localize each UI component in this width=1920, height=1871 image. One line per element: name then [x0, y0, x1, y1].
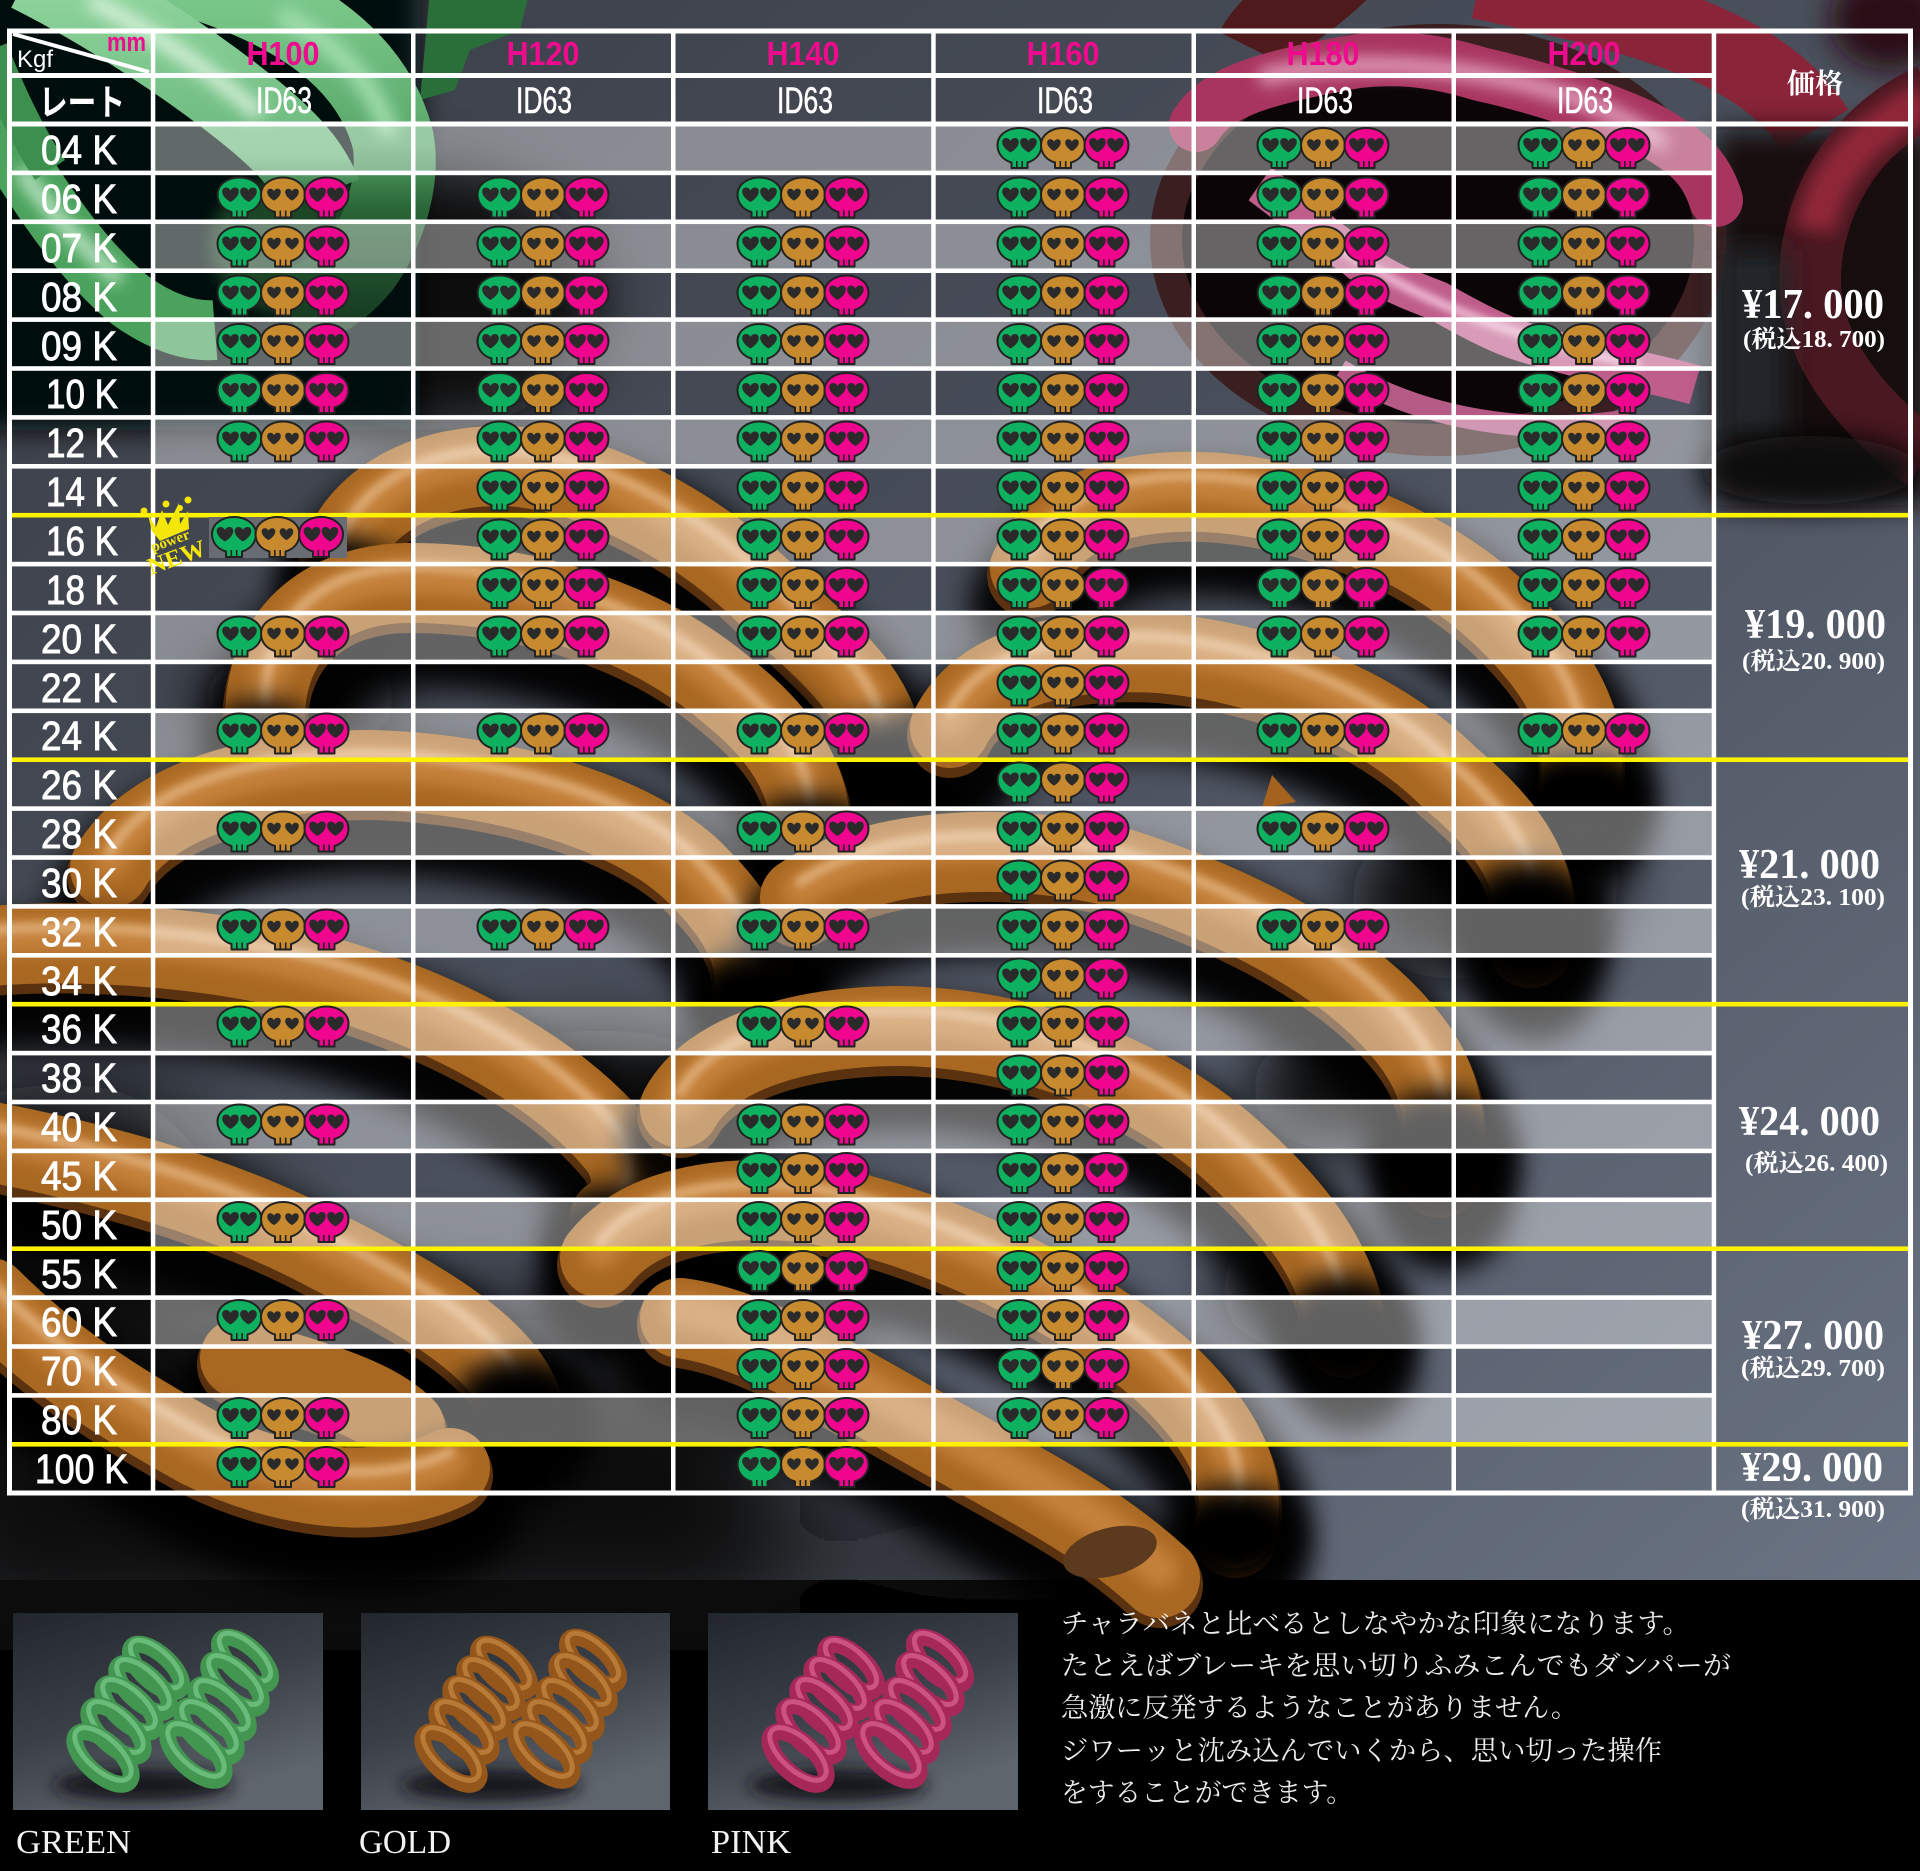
- rate column labels: 22 K: [41, 665, 117, 711]
- header: inner diameter: [256, 80, 1613, 121]
- rate column labels: 30 K: [41, 860, 117, 906]
- header: spring heights: H200: [1548, 35, 1620, 72]
- rate column labels: 18 K: [46, 567, 118, 613]
- photo: gold springs: [361, 1613, 670, 1810]
- rate column labels: 36 K: [41, 1006, 117, 1052]
- header: inner diameter: ID63: [777, 80, 833, 121]
- rate column labels: 10 K: [46, 371, 118, 417]
- availability row 22K: [998, 666, 1128, 706]
- header: inner diameter: ID63: [516, 80, 572, 121]
- rate column labels: 55 K: [41, 1251, 117, 1297]
- description text: たとえばブレーキを思い切りふみこんでもダンパーが: [1061, 1651, 1731, 1681]
- availability row 04K: [998, 128, 1650, 168]
- availability row 24K: [218, 714, 1650, 754]
- rate column labels: 12 K: [46, 420, 118, 466]
- price labels: [1739, 282, 1888, 1523]
- availability row 32K: [218, 910, 1388, 950]
- description text: [1061, 1609, 1731, 1808]
- crimson spring: [1166, 0, 1920, 505]
- price labels: (税込29. 700): [1741, 1355, 1885, 1382]
- availability row 16K: [478, 520, 1650, 560]
- rate column labels: 60 K: [41, 1299, 117, 1345]
- icon: 326 power NEW crown: [140, 496, 209, 581]
- price labels: ¥29. 000: [1741, 1445, 1883, 1491]
- availability row 20K: [218, 616, 1650, 656]
- header: spring heights: H120: [506, 35, 580, 72]
- header corner cell: Kgf / mm diagonal: mm: [107, 27, 146, 57]
- header corner cell: Kgf / mm diagonal: [13, 27, 149, 73]
- rate column labels: 07 K: [41, 225, 117, 271]
- availability row 09K: [218, 324, 1650, 364]
- availability row 36K: [218, 1006, 1128, 1046]
- header: spring heights: H180: [1286, 35, 1360, 72]
- price labels: (税込20. 900): [1742, 648, 1885, 675]
- header: spring heights: H140: [766, 35, 840, 72]
- rate column labels: 80 K: [41, 1397, 117, 1443]
- header corner cell: Kgf / mm diagonal: Kgf: [17, 46, 53, 73]
- floor shadow: central coil shadows: [200, 170, 1620, 1350]
- icon: 326 power NEW crown: NEW: [144, 536, 209, 581]
- availability row 50K: [218, 1202, 1128, 1242]
- rate column labels: 50 K: [41, 1202, 117, 1248]
- rate column labels: 32 K: [41, 909, 117, 955]
- rate column labels: 20 K: [41, 616, 117, 662]
- header: spring heights: [246, 35, 1620, 72]
- table light row bands: [155, 126, 1712, 1442]
- availability row 38K: [998, 1056, 1128, 1096]
- availability row 14K: [478, 470, 1650, 510]
- rate column labels: 34 K: [41, 958, 117, 1004]
- description text: 急激に反発するようなことがありません。: [1061, 1693, 1578, 1723]
- icon: 326 power NEW crown: 326: [156, 520, 181, 542]
- label: PINK: PINK: [711, 1824, 791, 1861]
- price labels: (税込26. 400): [1745, 1150, 1888, 1177]
- availability row 28K: [218, 812, 1388, 852]
- orange spring: near coils: [0, 927, 1415, 1616]
- price labels: ¥27. 000: [1742, 1313, 1884, 1359]
- availability row 10K: [218, 373, 1650, 413]
- rate column labels: 26 K: [41, 762, 117, 808]
- availability row 34K: [998, 958, 1128, 998]
- rate column labels: 28 K: [41, 811, 117, 857]
- rate column labels: 70 K: [41, 1348, 117, 1394]
- availability row 60K: [218, 1300, 1128, 1340]
- availability row 55K: [738, 1251, 1128, 1291]
- header: spring heights: H160: [1026, 35, 1100, 72]
- price labels: (税込31. 900): [1741, 1496, 1885, 1523]
- photo: green springs: [13, 1613, 323, 1810]
- availability row 06K: [218, 178, 1650, 218]
- header: inner diameter: ID63: [1037, 80, 1093, 121]
- price labels: ¥24. 000: [1739, 1099, 1880, 1145]
- price labels: ¥21. 000: [1739, 842, 1880, 888]
- floor shadow: bottom left: [0, 1080, 1220, 1650]
- green spring: [0, 0, 530, 430]
- label: GREEN: GREEN: [16, 1824, 131, 1861]
- price labels: (税込18. 700): [1743, 326, 1885, 353]
- availability row 80K: [218, 1398, 1128, 1438]
- rate column labels: 04 K: [41, 127, 117, 173]
- rate column labels: 24 K: [41, 713, 117, 759]
- availability row 100K: [218, 1447, 868, 1487]
- availability row 18K: [478, 568, 1650, 608]
- availability row 08K: [218, 276, 1650, 316]
- availability row 26K: [998, 762, 1128, 802]
- header: inner diameter: ID63: [1557, 80, 1613, 121]
- description text: ジワーッと沈み込んでいくから、思い切った操作: [1061, 1736, 1662, 1766]
- rate column labels: [35, 127, 128, 1492]
- header: spring heights: H100: [246, 35, 320, 72]
- price labels: (税込23. 100): [1741, 884, 1885, 911]
- H100 16K new product patch: [209, 517, 347, 558]
- header: price: 価格: [1787, 68, 1843, 100]
- availability row 12K: [218, 422, 1650, 462]
- description text: をすることができます。: [1061, 1778, 1353, 1808]
- rate column labels: 40 K: [41, 1104, 117, 1150]
- price labels: ¥17. 000: [1742, 282, 1884, 328]
- header: inner diameter: ID63: [256, 80, 312, 121]
- availability row 30K: [998, 860, 1128, 900]
- rate column labels: 16 K: [46, 518, 118, 564]
- rate column labels: 06 K: [41, 176, 117, 222]
- rate column labels: 08 K: [41, 274, 117, 320]
- availability row 70K: [738, 1349, 1128, 1389]
- rate column labels: 38 K: [41, 1055, 117, 1101]
- table grid lines: [7, 28, 1913, 1496]
- description text: チャラバネと比べるとしなやかな印象になります。: [1061, 1609, 1690, 1639]
- rate column labels: 100 K: [35, 1446, 128, 1492]
- availability row 40K: [218, 1104, 1128, 1144]
- label: GOLD: GOLD: [359, 1824, 451, 1861]
- price labels: ¥19. 000: [1745, 602, 1886, 648]
- rate column labels: 14 K: [46, 469, 118, 515]
- price tier yellow lines: [12, 513, 1908, 1447]
- orange spring: far coils: [110, 450, 1652, 1230]
- rate column labels: 09 K: [41, 323, 117, 369]
- photo: pink springs: [708, 1613, 1018, 1810]
- availability row 45K: [738, 1153, 1128, 1193]
- availability row 07K: [218, 226, 1650, 266]
- rate column labels: 45 K: [41, 1153, 117, 1199]
- icon: 326 power NEW crown: power: [149, 527, 192, 556]
- header: rate label: レート: [39, 82, 125, 123]
- header: inner diameter: ID63: [1297, 80, 1353, 121]
